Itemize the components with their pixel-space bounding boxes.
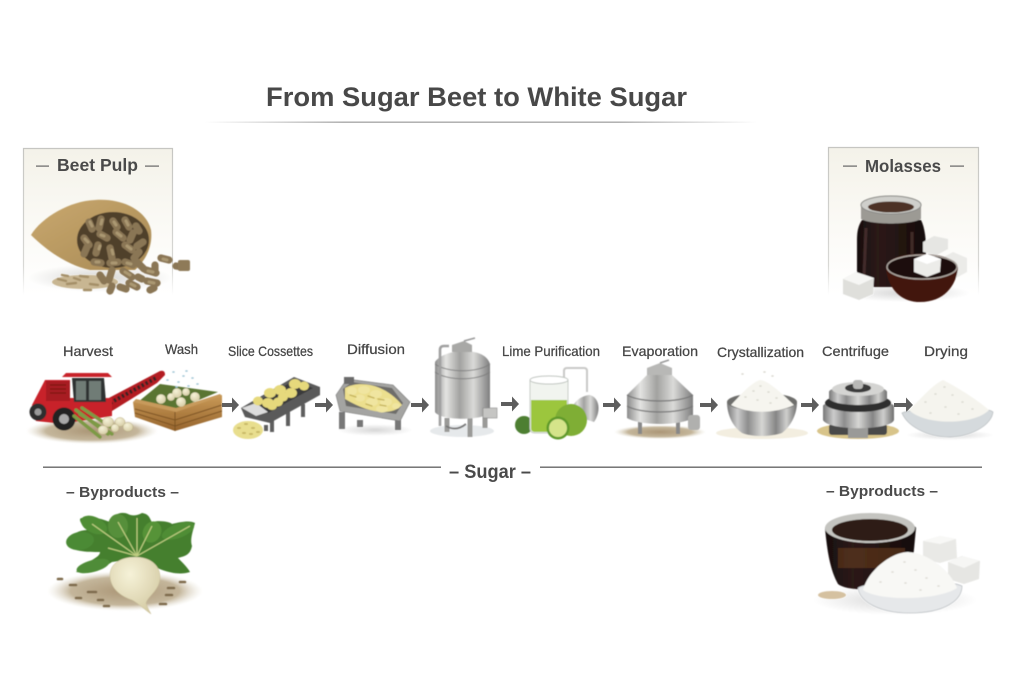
step: centrifuge [817,343,899,439]
label: lime purification: Lime Purification [502,343,600,359]
arrow 7 [801,398,819,412]
icon: lime juice beaker [515,368,599,440]
label: slice cossettes: Slice Cossettes [228,343,313,359]
step: evaporation [614,343,706,439]
step: wash [133,341,222,431]
icon: steel tank [430,338,497,437]
step: harvest [26,343,165,444]
title: From Sugar Beet to White Sugar [266,82,687,112]
icon: sugar beet with leaves in soil [47,512,203,614]
step: diffusion tank [430,338,497,437]
arrow 1 [222,398,239,412]
heading: molasses [843,156,964,176]
step: diffusion [336,341,413,436]
step: slice cossettes [228,343,320,439]
label: centrifuge: Centrifuge [822,343,889,359]
label: diffusion: Diffusion [347,341,405,357]
arrow 8 [894,398,913,412]
label: drying: Drying [924,343,968,359]
heading: byproducts left: – Byproducts – [66,485,179,501]
icon: red beet harvester [26,371,165,444]
process row [26,338,994,444]
heading: beet pulp: Beet Pulp [57,155,138,175]
byproducts: sugar beet [47,485,203,614]
icon: slicing conveyor with cossettes [233,377,320,439]
label: wash: Wash [165,341,198,357]
panel: molasses [828,148,978,302]
icon: dish of dried sugar [902,380,994,440]
panel: beet pulp [24,148,190,295]
icon: bowl of sugar crystals [716,372,808,439]
icon: sack of beet pellets [28,200,190,292]
arrow 6 [700,398,718,412]
icon: glass of molasses, dish of sugar and cubes [813,513,980,615]
label: evaporation: Evaporation [622,343,698,359]
arrow 5 [603,398,621,412]
arrow 4 [501,396,519,412]
arrow 3 [411,398,429,412]
section divider: sugar: – Sugar – [449,462,531,483]
heading: beet pulp [36,155,159,175]
arrow 2 [315,398,333,412]
icon: molasses jar, bowl and sugar cubes [840,196,970,302]
byproducts: molasses and sugar [813,484,980,615]
step: lime purification [502,343,600,440]
label: crystallization: Crystallization [717,344,804,360]
icon: wooden washing crate [133,371,222,431]
heading: molasses: Molasses [865,156,941,176]
heading: byproducts right: – Byproducts – [826,484,938,500]
icon: steel evaporator [614,360,706,439]
step: drying [902,343,994,440]
label: harvest: Harvest [63,343,113,359]
icon: diffusion tray [336,377,413,436]
icon: centrifuge machine [817,380,899,439]
step: crystallization [716,344,808,439]
